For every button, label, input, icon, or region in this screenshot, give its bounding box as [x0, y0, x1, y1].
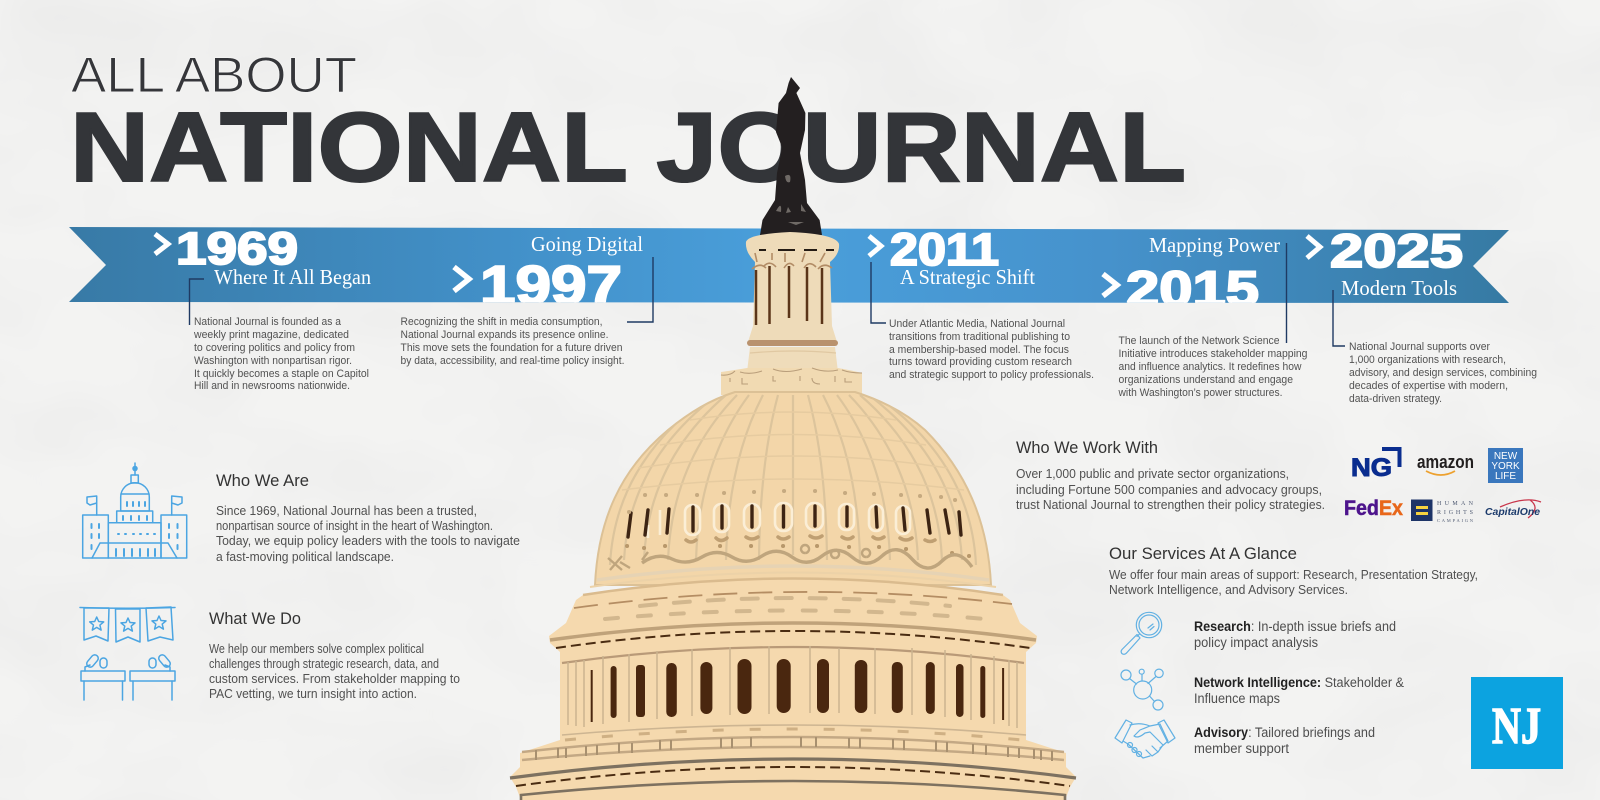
timeline years and labels — [154, 231, 1463, 303]
text: who we are body: Since 1969, National Journal has been a trusted, — [216, 504, 477, 518]
title line: NATIONAL JOURNAL: NATIONAL JOURNAL — [70, 92, 1186, 202]
icon: capitol building — [83, 463, 187, 558]
panel: our services — [1109, 545, 1478, 758]
text: services intro: We offer four main areas of support: Research, Presentation Strategy, — [1109, 568, 1478, 582]
panel: who we work with — [1016, 439, 1541, 523]
timeline text: 2011: and strategic support to policy professionals. — [889, 369, 1094, 381]
logo: Capital One: CapitalOne — [1485, 506, 1540, 518]
service: advisory — [1115, 720, 1375, 758]
milestone 2015: 2015 — [1126, 261, 1259, 317]
icon: magnifying glass — [1121, 612, 1162, 654]
logo: New York Life: YORK — [1491, 461, 1520, 472]
timeline text: 1969: Hill and in newsrooms nationwide. — [194, 380, 350, 392]
statue of freedom — [760, 77, 822, 235]
dome ribs — [610, 395, 976, 565]
milestone 1969: Where It All Began — [214, 265, 371, 289]
timeline text: 2025: advisory, and design services, combining — [1349, 367, 1537, 379]
title — [70, 47, 1186, 202]
timeline text: 1997 — [400, 316, 624, 367]
timeline text: 2015: The launch of the Network Science — [1118, 335, 1280, 347]
logo: NG: NG — [1351, 454, 1392, 482]
logo: Human Rights Campaign: HUMAN — [1437, 501, 1474, 507]
text: who we work with body: including Fortune 500 companies and advocacy groups, — [1016, 483, 1322, 497]
milestone 1997: Going Digital — [531, 232, 643, 256]
dome window band — [608, 491, 972, 570]
timeline text: 2015: Initiative introduces stakeholder mapping — [1118, 348, 1308, 360]
timeline text: 1997: by data, accessibility, and real-time policy insight. — [400, 355, 624, 367]
service: research — [1121, 612, 1396, 654]
timeline text: 2015: and influence analytics. It redefines how — [1118, 361, 1302, 373]
timeline ribbon — [69, 227, 1509, 303]
logo: New York Life — [1488, 448, 1523, 483]
heading: what we do: What We Do — [209, 610, 301, 628]
heading: who we are: Who We Are — [216, 472, 309, 490]
timeline text: 2011: turns toward providing custom research — [889, 356, 1072, 368]
milestone 2015: Mapping Power — [1149, 233, 1280, 257]
logo: amazon: amazon — [1417, 451, 1474, 472]
timeline text: 2011: a membership-based model. The focus — [889, 344, 1070, 356]
service: network intelligence — [1121, 669, 1404, 710]
timeline text: 2025: National Journal supports over — [1349, 341, 1490, 353]
logo: NJ: NJ — [1492, 698, 1541, 755]
icon: handshake — [1115, 720, 1175, 758]
text: network intelligence: Influence maps — [1194, 691, 1280, 706]
timeline text: 2011: Under Atlantic Media, National Journal — [889, 318, 1065, 330]
lantern tower — [721, 232, 862, 395]
text: who we are body: nonpartisan source of insight in the heart of Washington. — [216, 519, 493, 533]
milestone 2011: 2011 — [890, 224, 999, 275]
timeline text: 1969: It quickly becomes a staple on Capitol — [194, 368, 369, 380]
text: advisory — [1194, 725, 1375, 756]
milestone 2015 — [1101, 238, 1280, 303]
panel: what we do — [80, 607, 460, 701]
milestone 2025: Modern Tools — [1341, 276, 1457, 300]
timeline text: 2015: organizations understand and engage — [1118, 374, 1293, 386]
timeline text: 1969: Washington with nonpartisan rigor. — [194, 355, 352, 367]
text: what we do body — [209, 642, 460, 701]
text: research: Research: In-depth issue briefs and — [1194, 619, 1396, 634]
timeline text: 1997: Recognizing the shift in media consumption, — [400, 316, 602, 328]
text: what we do body: We help our members solve complex political — [209, 642, 424, 656]
text: network intelligence — [1194, 675, 1404, 706]
milestone 1969 — [154, 231, 371, 288]
milestone 2025 — [1305, 232, 1463, 295]
text: advisory: Advisory: Tailored briefings and — [1194, 725, 1375, 740]
timeline text: 1969: National Journal is founded as a — [194, 316, 341, 328]
timeline text: 2011 — [889, 318, 1094, 381]
text: what we do body: custom services. From stakeholder mapping to — [209, 672, 460, 686]
logo: NG — [1351, 449, 1400, 482]
milestone 1969: 1969 — [176, 223, 298, 274]
text: what we do body: PAC vetting, we turn insight into action. — [209, 687, 417, 701]
timeline text: 2025 — [1349, 341, 1537, 405]
timeline text: 1969 — [193, 316, 369, 392]
leader lines — [190, 243, 1345, 346]
timeline text: 2015: with Washington’s power structures. — [1118, 387, 1282, 399]
milestone 1997 — [452, 236, 643, 302]
text: research — [1194, 619, 1396, 650]
text: what we do body: challenges through strategic research, data, and — [209, 657, 439, 671]
timeline text: 2011: transitions from traditional publishing to — [889, 331, 1070, 343]
logo: New York Life: LIFE — [1495, 471, 1516, 482]
timeline text: 2025: decades of expertise with modern, — [1349, 380, 1508, 392]
logo: Human Rights Campaign — [1411, 500, 1474, 523]
timeline text: 1997: National Journal expands its presence online. — [400, 329, 608, 341]
milestone 2025: 2025 — [1330, 224, 1463, 277]
capitol dome illustration — [510, 77, 1076, 800]
text: research: policy impact analysis — [1194, 635, 1318, 650]
timeline text: 2025: data-driven strategy. — [1349, 393, 1442, 405]
timeline text: 2015 — [1118, 335, 1308, 399]
title line: ALL ABOUT: ALL ABOUT — [71, 47, 357, 103]
panel: who we are — [83, 463, 520, 564]
heading: our services: Our Services At A Glance — [1109, 545, 1297, 563]
text: who we are body: a fast-moving political landscape. — [216, 550, 394, 564]
icon: banners and podiums — [80, 607, 175, 700]
icon: network nodes — [1121, 669, 1163, 710]
timeline text: 2025: 1,000 organizations with research, — [1349, 354, 1506, 366]
logo: Capital One — [1485, 500, 1541, 518]
timeline text: 1969: to covering politics and policy from — [194, 342, 355, 354]
milestone 2011 — [868, 232, 1035, 288]
text: who we are body — [216, 504, 520, 564]
drum and colonnade — [510, 566, 1076, 800]
text: who we work with body: Over 1,000 public and private sector organizations, — [1016, 467, 1289, 481]
text: who we work with body: trust National Journal to strengthen their policy strategies. — [1016, 498, 1325, 512]
logo: FedEx: FedEx — [1344, 496, 1403, 520]
text: network intelligence: Network Intelligence: Stakeholder & — [1194, 675, 1404, 690]
milestone 2011: A Strategic Shift — [900, 265, 1035, 289]
text: services intro: Network Intelligence, and Advisory Services. — [1109, 583, 1348, 597]
logo: NJ — [1471, 677, 1563, 769]
milestone 1997: 1997 — [480, 254, 622, 316]
logo: Human Rights Campaign: RIGHTS — [1437, 510, 1473, 516]
logo: Human Rights Campaign: CAMPAIGN — [1437, 518, 1474, 523]
client logos — [1344, 448, 1541, 523]
heading: who we work with: Who We Work With — [1016, 439, 1158, 457]
text: who we are body: Today, we equip policy leaders with the tools to navigate — [216, 534, 520, 548]
dome shell — [595, 392, 991, 585]
logo: New York Life: NEW — [1494, 451, 1518, 462]
timeline text: 1997: This move sets the foundation for a future driven — [400, 342, 622, 354]
text: advisory: member support — [1194, 741, 1289, 756]
timeline text: 1969: weekly print magazine, dedicated — [193, 329, 349, 341]
text: who we work with body — [1016, 467, 1325, 512]
text: services intro — [1109, 568, 1478, 597]
